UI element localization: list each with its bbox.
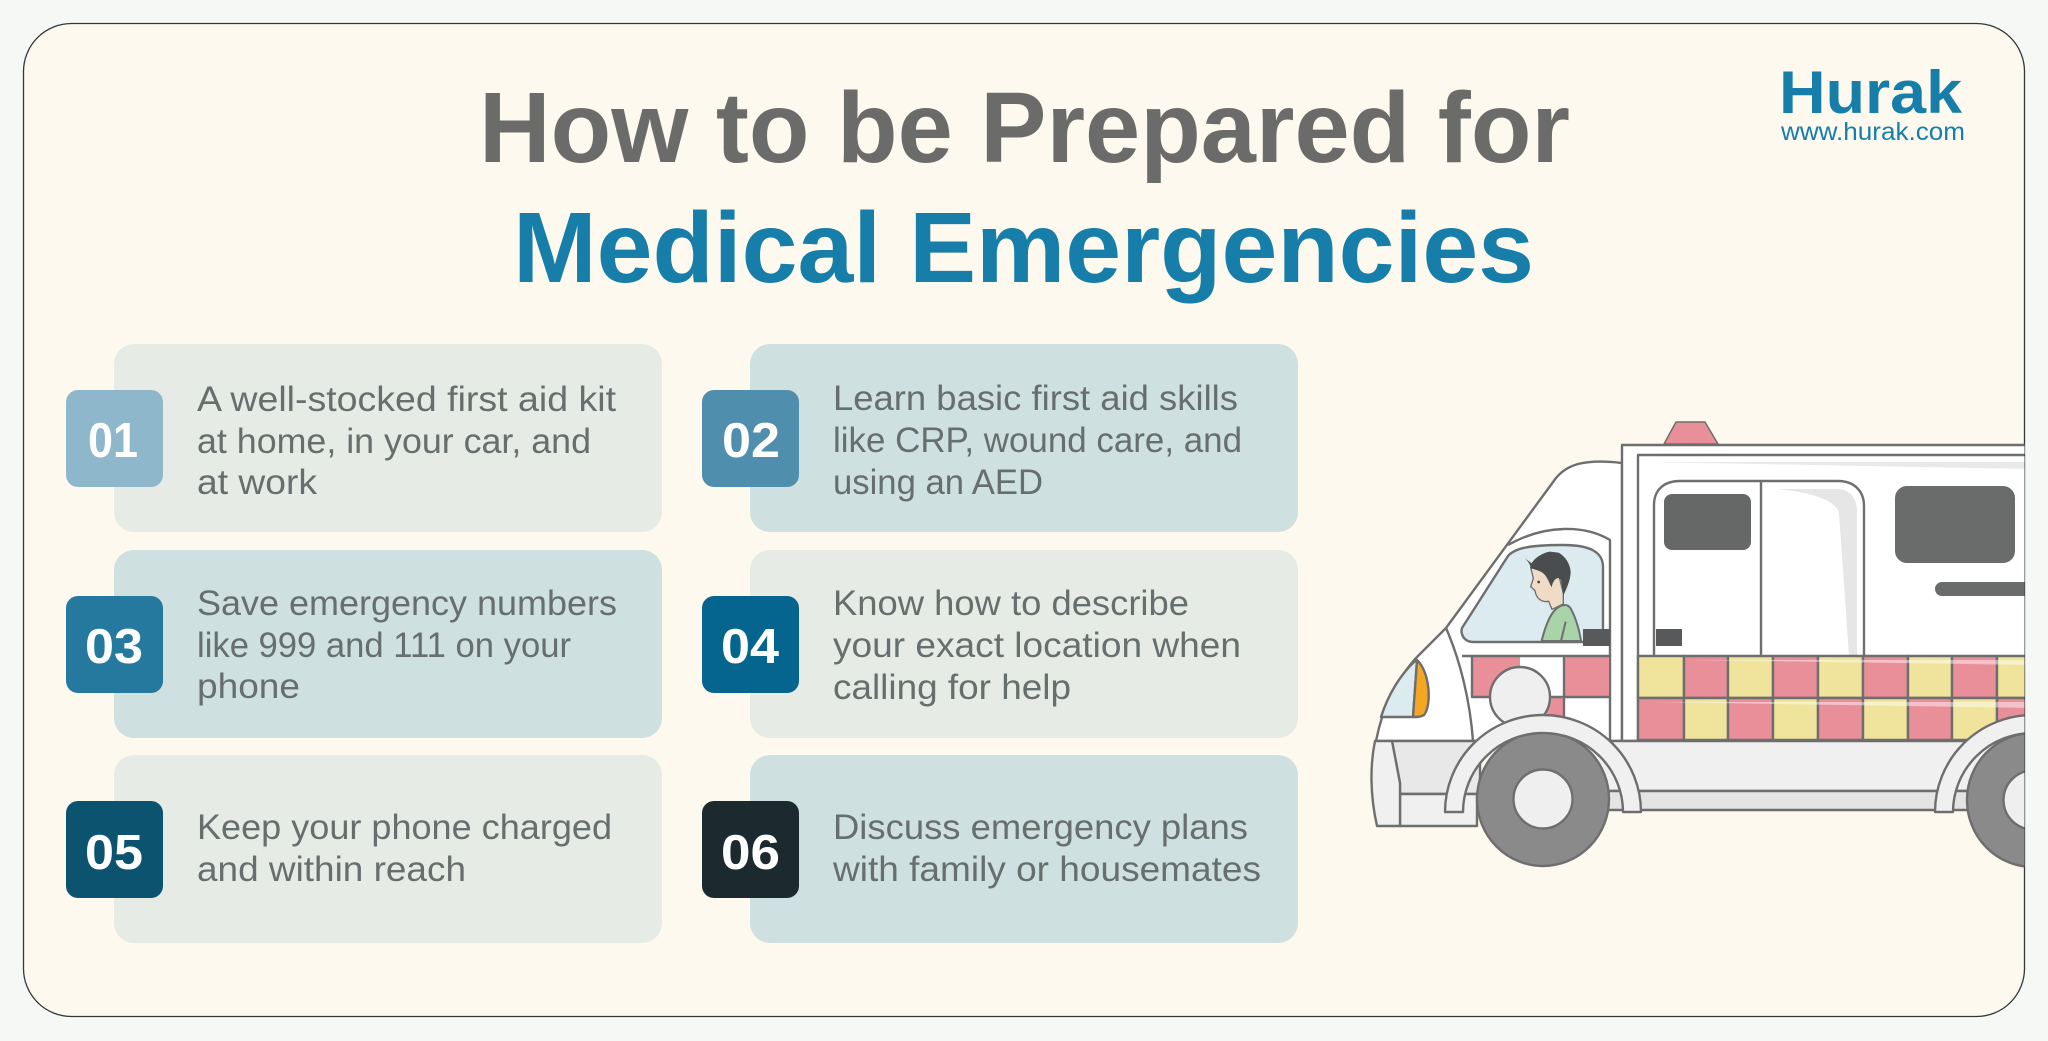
cab door outline [1508, 529, 1610, 741]
title line 1: How to be Prepared for [479, 72, 1570, 184]
driver face [1531, 567, 1563, 609]
door handle [1656, 629, 1682, 646]
text 05: and within reach [197, 850, 466, 889]
text 03: like 999 and 111 on your [197, 626, 571, 665]
badge 01: 01 [88, 414, 138, 468]
rear wheel arch [1934, 714, 2024, 814]
rear door [1654, 481, 1864, 656]
badge 01 [66, 390, 163, 487]
driver [1525, 552, 1581, 641]
text 02: Learn basic first aid skills [833, 379, 1238, 418]
inner panel line [1638, 455, 2048, 741]
door window [1664, 494, 1751, 550]
text 06: Discuss emergency plans [833, 808, 1248, 847]
front wheel [1477, 732, 1609, 866]
driver shirt [1542, 605, 1581, 641]
badge 06: 06 [721, 826, 780, 880]
logo wordmark: Hurak [1779, 59, 1963, 126]
badge 04: 04 [721, 620, 779, 674]
badge 06 [702, 801, 799, 898]
cab side checks [1462, 654, 1609, 716]
card 06 [702, 755, 1298, 943]
text 01: A well-stocked first aid kit [197, 380, 616, 419]
side bar [1935, 582, 2024, 596]
card 03 [66, 550, 662, 738]
badge 03: 03 [85, 620, 143, 674]
text 01: at home, in your car, and [197, 422, 591, 461]
badge 05 [66, 801, 163, 898]
side window [1895, 486, 2015, 563]
badge 05: 05 [85, 826, 143, 880]
ambulance illustration [1371, 422, 2048, 867]
headlight amber [1413, 660, 1429, 717]
door shading [1776, 489, 1857, 656]
text 05: Keep your phone charged [197, 808, 612, 847]
cab handle [1583, 629, 1610, 646]
text 03: Save emergency numbers [197, 584, 617, 623]
driver hair [1525, 552, 1571, 596]
badge 02 [702, 390, 799, 487]
title [479, 72, 1570, 304]
logo url: www.hurak.com [1780, 118, 1965, 146]
text 03: phone [197, 667, 300, 706]
card 01 [66, 344, 662, 532]
text 06: with family or housemates [832, 850, 1261, 889]
card 05 [66, 755, 662, 943]
badge 04 [702, 596, 799, 693]
rear wheel [1966, 734, 2024, 868]
sill upper [1589, 740, 1992, 790]
cab window [1462, 545, 1603, 642]
box body [1622, 445, 2048, 741]
card 04 [702, 550, 1298, 738]
badge 03 [66, 596, 163, 693]
roof shading [1647, 462, 2030, 469]
cab body [1376, 462, 1622, 741]
text 01: at work [197, 463, 318, 502]
text 04: calling for help [833, 668, 1071, 707]
sill lower [1609, 790, 1967, 812]
badge 02: 02 [722, 414, 780, 468]
front wheel arch [1445, 715, 1641, 812]
text 04: your exact location when [833, 626, 1241, 665]
checkered stripes [1638, 656, 2042, 740]
text 04: Know how to describe [833, 584, 1189, 623]
card 02 [702, 344, 1298, 532]
logo [1779, 59, 1965, 146]
title line 2: Medical Emergencies [513, 192, 1534, 304]
front bumper [1371, 741, 1480, 826]
text 02: using an AED [833, 463, 1043, 502]
beacon light [1664, 422, 1718, 444]
text 02: like CRP, wound care, and [833, 421, 1242, 460]
headlight glass [1381, 661, 1417, 717]
hood line [1446, 628, 1473, 741]
front wheel hub cap [1490, 667, 1550, 727]
